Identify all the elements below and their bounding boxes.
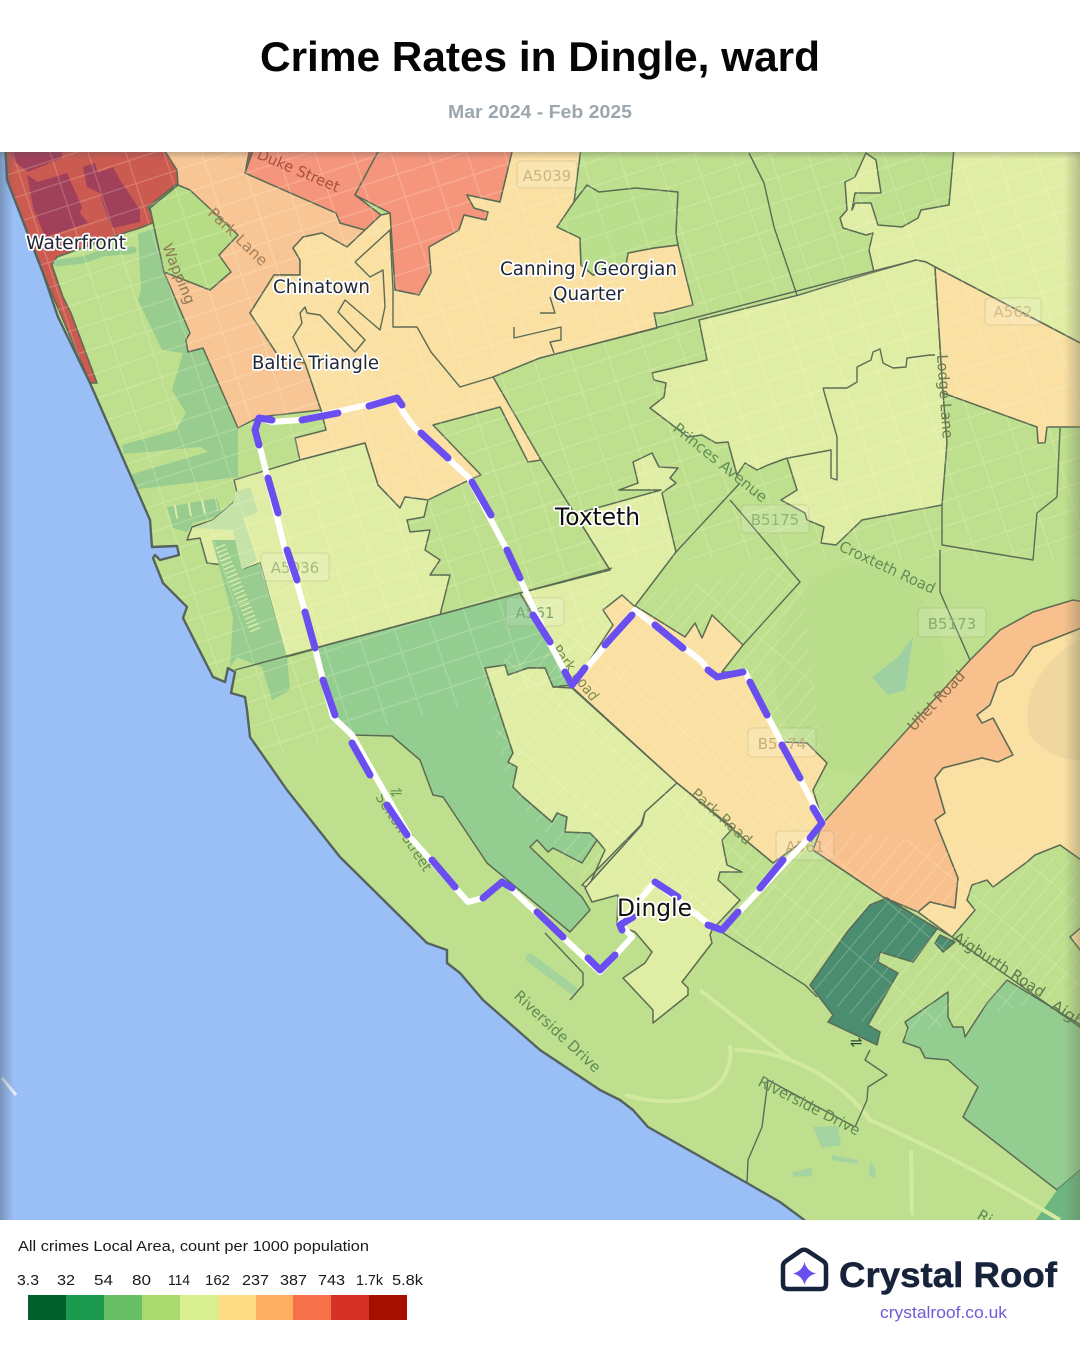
zone: marina lower dock overlay bbox=[212, 540, 287, 664]
road name labels: Ullet Road bbox=[904, 667, 969, 735]
zone: cream Lark Lane bbox=[572, 595, 827, 863]
place labels: Toxteth bbox=[554, 503, 640, 531]
logo url: crystalroof.co.uk bbox=[880, 1304, 1008, 1322]
zone: east cream block bbox=[935, 267, 1080, 443]
road name labels: Wapping bbox=[158, 241, 199, 307]
logo wordmark: Crystal Roof bbox=[839, 1256, 1057, 1295]
road name labels: Riverside Drive bbox=[755, 1073, 863, 1139]
road shield labels: A5039 bbox=[523, 167, 571, 185]
road name labels: Park Lane bbox=[204, 204, 271, 270]
neighbourhood boundary lines bbox=[235, 153, 1080, 1183]
map base land bbox=[0, 152, 1080, 1220]
zone: medium green Dingle bbox=[315, 593, 597, 932]
street texture bbox=[0, 152, 1080, 760]
zone: orange Ullet Road bbox=[813, 600, 1080, 912]
road name labels: Sefton Street bbox=[372, 789, 436, 875]
ward boundary: white outline bbox=[255, 398, 823, 972]
small shoreline markers in the sea bbox=[2, 1078, 16, 1095]
legend scale values: 80 bbox=[132, 1273, 151, 1289]
zone: small cream patch far right bbox=[1069, 928, 1080, 951]
legend scale values: 162 bbox=[205, 1273, 230, 1289]
zone: Toxteth yellow green bbox=[520, 453, 678, 685]
road shields bbox=[261, 161, 1041, 860]
road name labels: Riverside Drive bbox=[510, 987, 604, 1076]
road name labels: Park Road bbox=[687, 785, 756, 849]
road name labels: Duke Street bbox=[254, 145, 343, 196]
road name labels: Lodge Lane bbox=[933, 354, 957, 439]
legend bbox=[17, 1239, 424, 1320]
zone: marina pale overlay bbox=[193, 487, 258, 570]
zone: waterfront red bbox=[5, 148, 178, 383]
place labels bbox=[26, 233, 692, 922]
road shield labels: A561 bbox=[786, 838, 824, 856]
legend scale values: 237 bbox=[242, 1273, 269, 1289]
zone: docks dark green bbox=[122, 228, 290, 700]
road shield labels: A561 bbox=[516, 604, 554, 622]
road shield labels: B5173 bbox=[928, 615, 976, 633]
road shield labels: A562 bbox=[994, 303, 1032, 321]
legend scale values: 743 bbox=[318, 1273, 345, 1289]
zone: Sefton Park bbox=[775, 565, 945, 775]
legend scale values: 3.3 bbox=[17, 1273, 39, 1289]
zone: green corner bottom right bbox=[1036, 1170, 1080, 1220]
legend colour swatches bbox=[28, 1295, 407, 1320]
zone: salmon Ropewalks bbox=[355, 148, 513, 295]
legend scale values: 387 bbox=[280, 1273, 307, 1289]
zone: cream Canning Georgian Quarter bbox=[250, 148, 693, 508]
zone: Kensington yellow green bbox=[650, 260, 947, 545]
place labels: Chinatown bbox=[273, 277, 370, 298]
legend scale values: 114 bbox=[168, 1273, 190, 1289]
legend scale values: 54 bbox=[94, 1273, 113, 1289]
south roads bbox=[625, 990, 1060, 1220]
zone: Park Road yellow green bbox=[585, 783, 742, 1023]
zone: dark green Mossley Hill Road bbox=[810, 898, 955, 1045]
place labels: Waterfront bbox=[26, 233, 126, 254]
zone: tan playing fields bbox=[1028, 644, 1073, 759]
sea bbox=[0, 140, 815, 1228]
legend scale values: 32 bbox=[57, 1273, 75, 1289]
zone: waterfront dark buildings bbox=[8, 148, 140, 237]
place labels: Dingle bbox=[617, 894, 692, 922]
road shield labels: A5036 bbox=[271, 559, 319, 577]
ward boundary: purple dashes bbox=[255, 398, 822, 970]
zone: Dingle central yellow green bbox=[485, 665, 677, 888]
legend scale values: 1.7k bbox=[356, 1273, 384, 1289]
legend scale values: 5.8k bbox=[392, 1273, 424, 1289]
zone: medium green Aigburth south bbox=[903, 980, 1080, 1190]
zone: cream Aigburth bbox=[918, 627, 1080, 937]
zone: Duke Street dark red sliver bbox=[248, 152, 252, 161]
logo: Crystal Roof bbox=[783, 1250, 1057, 1322]
zone: waterfront dock strip bbox=[57, 250, 133, 263]
upper dock piers bbox=[175, 504, 217, 512]
place labels: Quarter bbox=[553, 284, 624, 305]
Otterspool ponds bbox=[792, 1126, 876, 1178]
legend scale values bbox=[17, 1273, 424, 1289]
legend title: All crimes Local Area, count per 1000 population bbox=[18, 1239, 369, 1255]
zone: orange Baltic bbox=[150, 148, 365, 428]
title: Crime Rates in Dingle, ward bbox=[260, 33, 820, 80]
marina pier combs bbox=[220, 546, 256, 632]
zone: Dingle west yellow green bbox=[187, 443, 450, 657]
park pond bbox=[872, 637, 913, 695]
place labels: Baltic Triangle bbox=[252, 353, 379, 374]
zone: north-east yellow green bbox=[840, 148, 1080, 345]
road name labels: Ri bbox=[974, 1206, 996, 1229]
zone: north green Georgian patch bbox=[557, 185, 678, 275]
road shield labels bbox=[271, 167, 1032, 856]
road name labels: Aigburth Road bbox=[950, 928, 1049, 1001]
road name labels: ⇌ bbox=[390, 783, 403, 801]
road shield labels: B5174 bbox=[758, 735, 806, 753]
road name labels: Park Road bbox=[548, 641, 603, 704]
road name labels: Croxteth Road bbox=[836, 537, 938, 598]
icon: house with star bbox=[783, 1250, 826, 1289]
subtitle: date range: Mar 2024 - Feb 2025 bbox=[448, 101, 632, 122]
road name labels bbox=[158, 145, 1080, 1229]
map edge shading bbox=[0, 152, 1080, 1220]
place labels: Canning / Georgian bbox=[500, 259, 677, 280]
zone: green Wapping block bbox=[150, 185, 238, 290]
riverside lake bbox=[530, 958, 573, 990]
road shield labels: B5175 bbox=[751, 511, 799, 529]
road name labels: ⇌ bbox=[850, 1033, 863, 1051]
zone: salmon Duke Street bbox=[245, 148, 381, 230]
road name labels: Princes Avenue bbox=[669, 419, 771, 506]
